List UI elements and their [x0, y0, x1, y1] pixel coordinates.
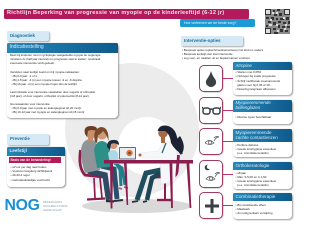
text: combinatietherapie: • Bij onvoldoende effect: [236, 202, 266, 206]
panel: Contactlenzen: [233, 129, 292, 157]
label: Preventie: [7, 134, 49, 144]
logo name: OOGHEELKUNDIG: [43, 204, 68, 208]
subtitle bar: Hoe verleenen we de beste zorg?: [184, 21, 236, 25]
heading: Orthokeratologie: Orthokeratologie: [236, 163, 269, 168]
table: [104, 160, 193, 208]
label: Diagnostiek: Diagnostiek: [10, 32, 35, 38]
logo name: GEZELSCHAP: [43, 208, 62, 212]
heading: Myopieremmende brillenglazen: brillenglazen: [236, 105, 260, 110]
text: indicatie: Meet bij kinderen met in cycloplegie vastgestelde myopie de ooglengte: [10, 53, 100, 57]
text: orthokeratologie: • Max. S-5,00 en C-1,50: [236, 175, 266, 179]
text: brillenglazen: • Diverse typen beschikbaar: [236, 114, 271, 118]
heading: Leefstijl: [7, 147, 65, 156]
father: [81, 126, 114, 202]
text: contactlenzen: • Perifere defocus: [236, 143, 258, 147]
text: combinatietherapie: • Zo nodig tertiaire verwijzing: [236, 211, 272, 215]
heading: Indicatiestelling: Indicatiestelling: [10, 44, 44, 50]
callout: basis van de behandeling: [9, 157, 61, 163]
text: laat indicatie: Laat indicatie voor interventie vaststellen door oogarts of orthoptist: [10, 90, 95, 94]
icon: moon and eye: [199, 160, 222, 188]
panel: Atropine: [233, 62, 292, 94]
heading: Myopieremmende zachte contactlenzen: [233, 129, 292, 142]
heading: Combinatietherapie: [233, 193, 292, 201]
logo name: NEDERLANDS: [43, 200, 62, 204]
heading: Myopieremmende brillenglazen: Myopieremmende: [236, 100, 271, 105]
text: grenswaarden: • Bij 10-12 jaar met myopie en aslengtegroei ≥0,15 mm/jr: [12, 110, 84, 114]
panel: Orthokeratologie: [233, 162, 292, 188]
icon: contact lens on eye: [199, 128, 222, 155]
heading: Myopieremmende zachte contactlenzen: zachte contactlenzen: [236, 135, 278, 140]
text: interventie bullets: • Leg voor- en nadelen uit en bepaal samen voorkeur: [182, 56, 250, 60]
text: verwijzen: • Bij 0-3 jaar: -1 of ≥: [12, 74, 37, 78]
text: leefstijl bullets: • Voorkom langdurig dichtbijwerk: [10, 169, 52, 173]
panel: Indicatiestelling: [7, 43, 118, 118]
text: verwijzen: • Bij 4-5 jaar: -4 (≥) een myopie tussen -3 en -6 dioptrie: [12, 78, 82, 82]
text: interventie bullets: • Bespreek leefstijl vóór start interventie: [182, 52, 233, 56]
label: Interventie-opties: [181, 36, 243, 46]
panel: Leefstijl: [7, 147, 65, 186]
text: leefstijl bullets: • ≥2 uur per dag naar buiten: [10, 164, 46, 168]
text: grenswaarden: • Bij 6-9 jaar met myopie en aslengtegroei ≥0,20 mm/jr: [12, 106, 81, 110]
doctor chair: [152, 155, 178, 200]
arrow: combinatietherapie: [222, 204, 233, 207]
logo name: [43, 200, 68, 212]
heading: Atropine: [233, 62, 292, 70]
icon: plus: [199, 192, 222, 219]
arrow: brillenglazen: [222, 109, 233, 112]
text: grenswaarden: [10, 102, 84, 114]
heading: Myopieremmende brillenglazen: [233, 100, 292, 112]
mother: [94, 127, 123, 201]
heading: Leefstijl: Leefstijl: [10, 148, 27, 153]
text: contactlenzen: [236, 143, 276, 155]
text: orthokeratologie: • ≥8 jaar: [236, 170, 246, 174]
label: Diagnostiek: [7, 30, 49, 41]
text: orthokeratologie: • Goede lenshygiëne essentieel: [236, 179, 276, 183]
logo: NOG: [4, 197, 68, 214]
text: verwijzen: Verwijzen naar kerlijst zeeld om bij myopie-netkaarten:: [10, 70, 80, 74]
text: atropine: • Schrijf multifocale meetvarerende: [236, 79, 280, 83]
text: verwijzen: [10, 70, 82, 86]
text: indicatie: minstens 2x (half jaar interval) om progressie vast te stellen; noodzaak: [10, 57, 100, 61]
text: atropine: glazen voor bij 0,05 of 1%: [237, 83, 270, 87]
text: interventie bullets: • Bespreek opties (optisch/medicamenteus) met kind en ouders: [182, 48, 263, 52]
panel: Brillenglazen: [233, 100, 292, 124]
laptop: [119, 147, 136, 160]
child: [107, 140, 128, 189]
text: atropine: • Dosering langzaam afbouwen: [236, 87, 276, 91]
text: grenswaarden: Grenswaarden voor interventie:: [10, 102, 50, 106]
text: atropine: • Starten met 0,05%: [236, 70, 261, 74]
title bar: [4, 9, 249, 18]
text: verwijzen: • Bij ≥6 jaar -4 (≥) een myopie hoger dan de leeftijd: [12, 82, 77, 86]
title bar: Richtlijn Beperking van progressie van myopie op de kinderleeftijd (6-12 jr): [7, 10, 224, 16]
text: interventie bullets: [182, 48, 263, 60]
text: orthokeratologie: (o.a. microbiële keratitis): [237, 183, 269, 187]
heading: Myopieremmende zachte contactlenzen: Myopieremmende: [236, 130, 272, 135]
text: combinatietherapie: • Maatwerk: [236, 207, 250, 211]
text: atropine: • Ophogen bij snelle progressie: [236, 74, 276, 78]
arrow: orthokeratologie: [222, 173, 233, 176]
text: leefstijl bullets: • 20-20-2 regel: [10, 173, 30, 177]
heading: Combinatietherapie: Combinatietherapie: [236, 194, 275, 199]
arrow: atropine: [222, 77, 233, 80]
callout: basis van de behandeling: Basis van de behandeling!: [10, 158, 51, 162]
heading: Orthokeratologie: [233, 162, 292, 170]
text: leefstijl bullets: [10, 164, 52, 182]
text: contactlenzen: • Goede lenshygiëne essentieel: [236, 147, 276, 151]
arrow: contactlenzen: [222, 140, 233, 143]
panel: Combinatietherapie: [233, 193, 292, 219]
left chair: [80, 150, 105, 200]
doctor: [132, 125, 184, 202]
logo wordmark: NOG: [4, 197, 40, 214]
text: contactlenzen: (o.a. microbiële keratitis): [237, 151, 269, 155]
heading: Indicatiestelling: [7, 43, 118, 52]
text: indicatie: [10, 53, 100, 65]
text: laat indicatie: (4-8 jaar), of door oogarts, orthoptist of optometrist (8-12 jaar).: [10, 94, 90, 98]
text: indicatie: eventuele interventie vindt gedeelt.: [10, 61, 55, 65]
label: Preventie: Preventie: [10, 136, 30, 141]
subtitle bar: [180, 19, 254, 27]
text: atropine: [236, 70, 280, 91]
text: orthokeratologie: [236, 170, 276, 187]
icon: glasses: [199, 97, 222, 124]
text: leefstijl bullets: • Gebruiksduidelijke voorhoofd: [10, 178, 50, 182]
text: laat indicatie: [10, 90, 95, 98]
QR code: [265, 9, 290, 34]
text: combinatietherapie: [236, 202, 272, 215]
icon: drop: [199, 65, 222, 92]
heading: Atropine: Atropine: [236, 63, 252, 68]
label: Interventie-opties: Interventie-opties: [184, 38, 221, 43]
